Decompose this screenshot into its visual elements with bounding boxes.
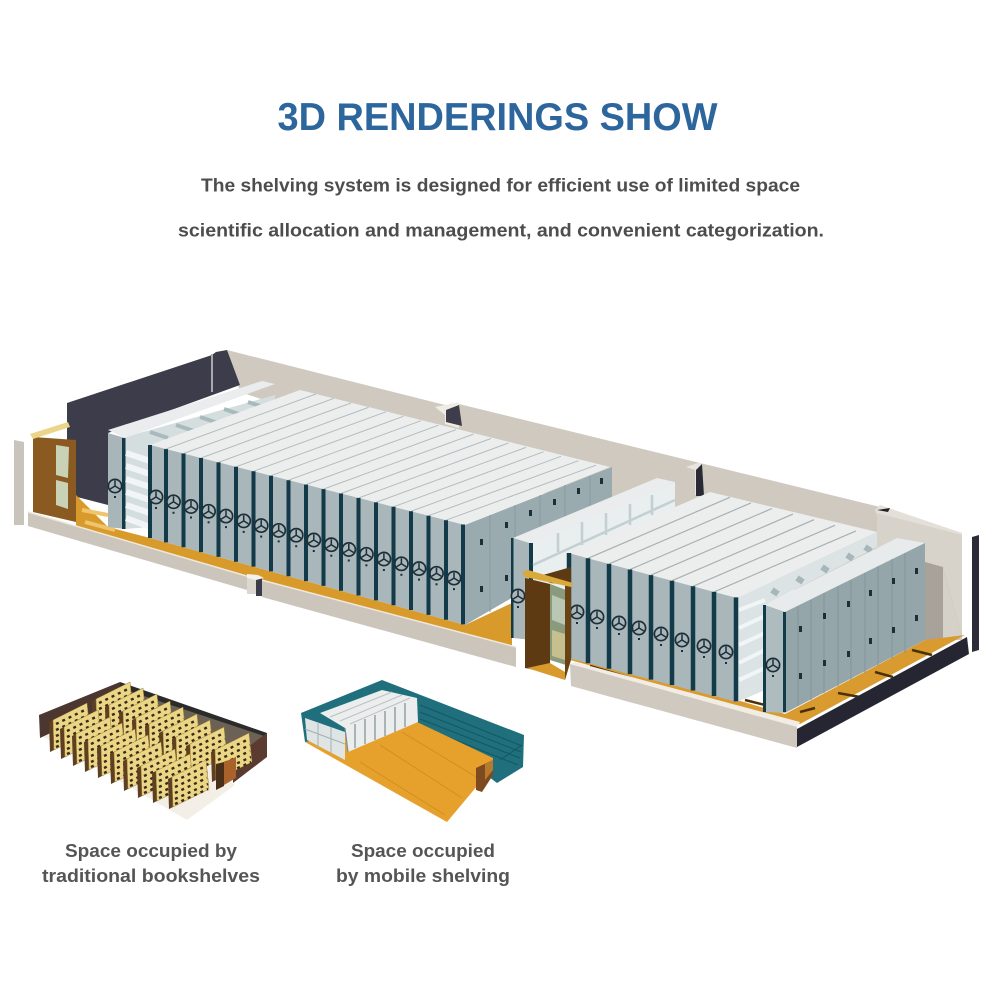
top surface — [150, 390, 610, 525]
back open row — [511, 478, 675, 640]
caption: mobile shelving — [336, 841, 510, 886]
small rendering: mobile shelving — [301, 680, 524, 822]
dark stripes — [569, 553, 736, 701]
left floor strip — [76, 495, 516, 652]
open side shelves — [737, 532, 877, 702]
teal walls — [301, 680, 524, 783]
room floor — [40, 700, 235, 820]
subtitle text block: scientific allocation and management, and convenient categorization. — [178, 220, 824, 240]
wooden floor — [305, 722, 493, 822]
front face — [568, 553, 737, 702]
subtitle text block — [178, 176, 824, 240]
door — [216, 762, 224, 790]
main 3D rendering of archive room — [14, 350, 979, 748]
dark stripes — [150, 445, 463, 624]
caption: traditional bookshelves — [42, 841, 260, 886]
small rendering: traditional bookshelves — [39, 682, 267, 820]
right end pillar — [972, 535, 979, 652]
top ridges — [588, 497, 856, 592]
caption: traditional bookshelves: Space occupied by — [65, 841, 237, 861]
hand wheels — [570, 605, 733, 664]
back open row — [108, 381, 275, 529]
top surface — [568, 492, 877, 598]
side panel lines and handles — [480, 476, 603, 612]
side face — [465, 467, 612, 625]
front wall highlight — [28, 512, 516, 647]
center door — [522, 567, 573, 680]
caption: mobile shelving: by mobile shelving — [336, 866, 510, 886]
back wall — [120, 682, 267, 738]
left brick wall — [39, 682, 120, 738]
floor light patches — [82, 510, 115, 530]
compact shelves front — [305, 718, 345, 760]
front low wall right — [570, 664, 797, 748]
back wall — [227, 350, 962, 640]
dark end wall — [67, 350, 240, 505]
front low wall left — [28, 512, 516, 667]
wall courses — [420, 705, 522, 765]
pillar at front wall — [247, 574, 264, 596]
title: 3D RENDERINGS SHOW — [278, 96, 718, 139]
left door — [30, 422, 76, 522]
caption: mobile shelving: Space occupied — [351, 841, 495, 861]
front face — [150, 445, 465, 625]
back wall corner post — [211, 354, 213, 392]
caption: traditional bookshelves: traditional bookshelves — [42, 866, 260, 886]
subtitle text block: The shelving system is designed for efficient use of limited space — [201, 176, 800, 196]
door — [476, 760, 493, 792]
shelving block 2 — [511, 478, 877, 702]
back wall pillars — [435, 402, 962, 640]
front group of shelves — [49, 703, 209, 809]
front row shelf — [763, 538, 925, 713]
floor rails — [590, 650, 932, 712]
floor grain — [360, 732, 478, 815]
hand wheels — [149, 490, 461, 590]
front wall cap — [570, 662, 800, 727]
back group of shelves — [92, 682, 252, 782]
left wall stub — [14, 440, 24, 525]
top ridges — [166, 394, 596, 520]
right floor — [570, 635, 965, 724]
dark right wall — [797, 637, 969, 747]
shelving block 1 — [108, 381, 612, 625]
right brick wall — [233, 733, 267, 783]
compact shelves back — [320, 690, 418, 752]
